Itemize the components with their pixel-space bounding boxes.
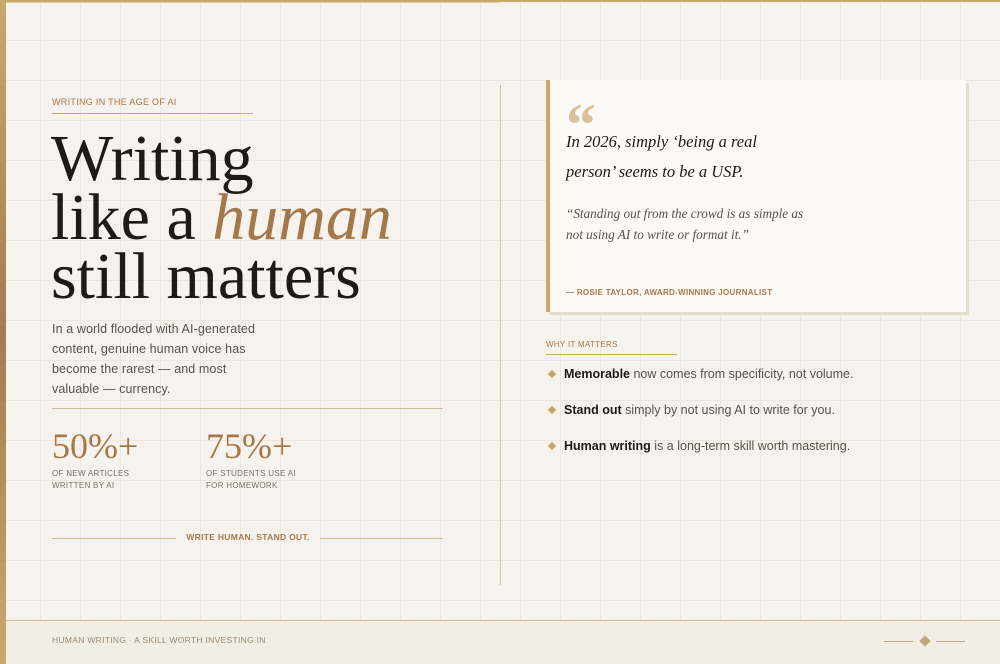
stat: 50%: 50%+ bbox=[52, 426, 138, 466]
main quote: In 2026, simply ‘being a real person’ seems to be a USP. bbox=[566, 132, 757, 181]
kicker label: WRITING IN THE AGE OF AI bbox=[52, 97, 177, 107]
title: like a human bbox=[51, 181, 392, 254]
footer bbox=[6, 620, 1000, 664]
stat: 50%: WRITTEN BY AI bbox=[52, 481, 114, 490]
title: still matters bbox=[51, 240, 361, 313]
attribution: — ROSIE TAYLOR, AWARD-WINNING JOURNALIST bbox=[566, 288, 772, 297]
tagline divider: WRITE HUMAN. STAND OUT. bbox=[186, 532, 310, 542]
bullet list: Memorable now comes from specificity, not volume. bbox=[564, 367, 853, 381]
intro paragraph: In a world flooded with AI-generated content, genuine human voice has become the rarest — and most valuable — currency. bbox=[52, 322, 255, 396]
quote card bbox=[546, 80, 966, 312]
why it matters heading bbox=[546, 340, 677, 355]
stat: 75% bbox=[206, 426, 296, 490]
why it matters heading: WHY IT MATTERS bbox=[546, 340, 618, 349]
stat: 50% bbox=[52, 426, 138, 490]
bullet list: Human writing is a long-term skill worth mastering. bbox=[564, 439, 850, 453]
kicker label bbox=[52, 97, 253, 114]
footer: HUMAN WRITING · A SKILL WORTH INVESTING IN bbox=[52, 635, 266, 645]
stat: 75%: 75%+ bbox=[206, 426, 292, 466]
stat: 75%: OF STUDENTS USE AI bbox=[206, 469, 296, 478]
title bbox=[51, 122, 392, 313]
bullet list bbox=[548, 367, 853, 453]
icon: diamond ornament bbox=[884, 636, 965, 646]
stat: 50%: OF NEW ARTICLES bbox=[52, 469, 129, 478]
stat: 75%: FOR HOMEWORK bbox=[206, 481, 278, 490]
icon: quote mark: “ bbox=[566, 92, 596, 158]
bullet list: Stand out simply by not using AI to write for you. bbox=[564, 403, 835, 417]
title: Writing bbox=[51, 122, 254, 195]
sub quote: “Standing out from the crowd is as simple as not using AI to write or format it.” bbox=[566, 206, 803, 242]
